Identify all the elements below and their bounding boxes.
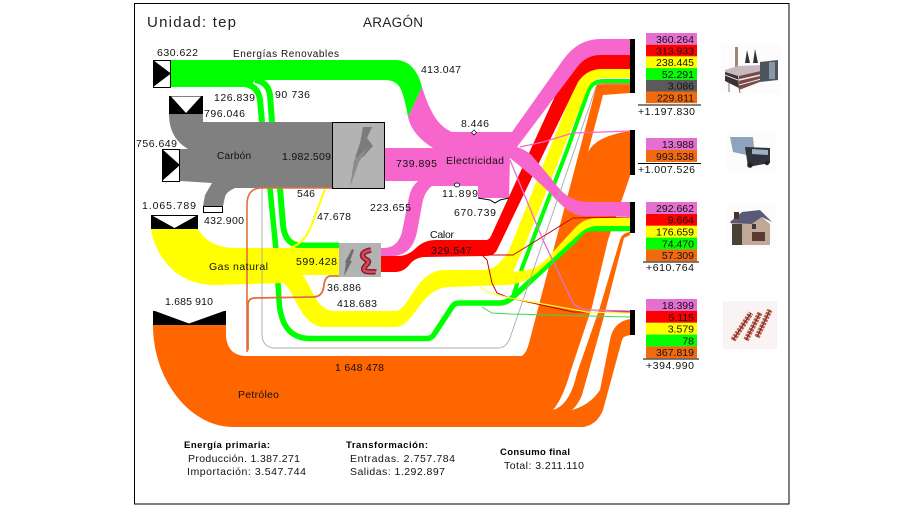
label: Energías Renovables (233, 49, 339, 60)
label: 630.622 (157, 47, 198, 59)
label: 36.886 (327, 282, 361, 294)
marker: diamond (472, 130, 476, 135)
table: transporte: 13.988 (662, 139, 694, 151)
table: hogar: 292.662 (656, 203, 694, 215)
table: transporte (638, 138, 701, 176)
thin flow: naranja 36.886 (248, 276, 339, 350)
flow: calor (381, 55, 630, 272)
icon: small lightning (344, 249, 354, 276)
flow: gas natural (151, 69, 630, 327)
source: renovables (153, 60, 171, 88)
label: Carbón (217, 151, 251, 162)
table: industria: 3.086 (668, 80, 694, 92)
icon: heat wave (363, 250, 376, 272)
table: agricultura: 5.115 (668, 312, 694, 324)
table: agricultura: 367.819 (656, 347, 694, 359)
label: 546 (297, 188, 315, 200)
labels on flows (136, 47, 504, 401)
label: 126.839 (214, 92, 255, 104)
flow: electricidad (381, 39, 630, 256)
label: 739.895 (396, 158, 437, 170)
table: hogar (643, 202, 699, 274)
label: 432.900 (204, 215, 244, 227)
label: 329.547 (431, 245, 472, 257)
flow: renovables a carbón, tramo 1 (245, 84, 262, 122)
title: unit: Unidad: tep (147, 14, 236, 31)
table: agricultura: 3.579 (668, 324, 694, 336)
transformation box: cogeneración (339, 243, 381, 277)
table: transporte: +1.007.526 (638, 164, 695, 176)
thin flow: amarillo 47.678 (290, 189, 325, 248)
flow: renovables a electricidad (171, 60, 422, 117)
flow: renovables a carbón, tramo 2 (255, 80, 272, 122)
icon: factory (721, 44, 781, 94)
summary: energía primaria (184, 440, 306, 478)
title: region: ARAGÓN (363, 15, 423, 30)
label: Gas natural (209, 261, 268, 273)
summary: transformación: Transformación: (346, 440, 428, 451)
label: 1 648 478 (335, 362, 384, 374)
label: 796.046 (204, 108, 245, 120)
summary: consumo final: Consumo final (500, 447, 570, 458)
thin flow: rojo a agricultura (482, 255, 630, 312)
summary: transformación: Salidas: 1.292.897 (350, 466, 445, 478)
sankey flows (151, 39, 630, 427)
label: 90 736 (275, 89, 310, 101)
label: 1.065.789 (142, 200, 196, 212)
label: 47.678 (317, 211, 351, 223)
transformation box: electricidad (332, 122, 384, 188)
table: industria: +1.197.830 (638, 106, 695, 118)
table: hogar: 9.664 (668, 214, 694, 226)
label: 756.649 (136, 138, 177, 150)
label: Calor (430, 229, 454, 241)
label: 413.047 (421, 64, 461, 76)
flow: verde a transformación (280, 188, 339, 246)
flow: verde a industria (512, 81, 630, 300)
table: industria: 238.445 (656, 57, 694, 69)
marker: bracket 670.739 (478, 198, 509, 203)
icon: wheat (723, 301, 777, 349)
thin flow: naranja 546 (247, 188, 332, 352)
table: industria (638, 33, 701, 118)
summary: energía primaria: Importación: 3.547.744 (187, 466, 306, 478)
thin flow: rojo a hogar (490, 217, 630, 255)
marker: circle (454, 183, 460, 187)
label: 11.899 (442, 188, 478, 200)
table: industria: 52.291 (662, 69, 694, 81)
sink: carbón 432.900 (204, 206, 222, 212)
table: transporte: 993.538 (656, 151, 694, 163)
thin flow: rosa a agricultura (510, 160, 630, 311)
table: hogar: 57.309 (662, 250, 694, 262)
icon: house (726, 205, 776, 249)
thin flow: gris (262, 84, 630, 348)
source: carbón producción (169, 96, 203, 114)
sink bars (630, 39, 635, 335)
table: industria: 229.811 (657, 92, 694, 104)
flow: carbón (169, 114, 332, 206)
thin flow: rosa a transporte (520, 131, 630, 147)
label: Petróleo (238, 389, 279, 401)
summary: consumo final (500, 447, 584, 472)
thin flow: verde a agricultura (482, 307, 630, 317)
label: 599.428 (296, 256, 337, 268)
label: 670.739 (454, 207, 496, 219)
page frame (134, 4, 789, 504)
summary: transformación (346, 440, 455, 478)
icon: truck (726, 132, 776, 172)
thin flow: amarillo a agricultura (480, 287, 630, 313)
flow: verde a hogar (270, 188, 630, 338)
table: hogar: +610.764 (646, 262, 694, 274)
summary: transformación: Entradas. 2.757.784 (350, 453, 455, 465)
table: hogar: 74.470 (662, 238, 694, 250)
label: 223.655 (370, 202, 411, 214)
table: agricultura: 78 (682, 336, 694, 348)
table: hogar: 176.659 (656, 226, 694, 238)
summary: consumo final: Total: 3.211.110 (504, 460, 584, 472)
table: agricultura (643, 299, 699, 372)
table: industria: 360.264 (656, 34, 694, 46)
summary: energía primaria: Energía primaria: (184, 440, 270, 451)
summary: energía primaria: Producción. 1.387.271 (188, 453, 300, 465)
flow: petróleo (153, 83, 630, 427)
label: Electricidad (446, 155, 504, 167)
label: 1.685 910 (165, 296, 213, 308)
label: 8.446 (461, 118, 489, 130)
icon: lightning bolt (350, 127, 373, 187)
source: gas natural (151, 215, 198, 229)
source: petróleo (153, 311, 226, 325)
table: industria: 313.933 (656, 46, 694, 58)
source: carbón importación (162, 149, 180, 182)
table: agricultura: 18.399 (662, 300, 694, 312)
label: 418.683 (337, 298, 377, 310)
table: agricultura: +394.990 (646, 360, 694, 372)
label: 1.982.509 (282, 151, 331, 163)
